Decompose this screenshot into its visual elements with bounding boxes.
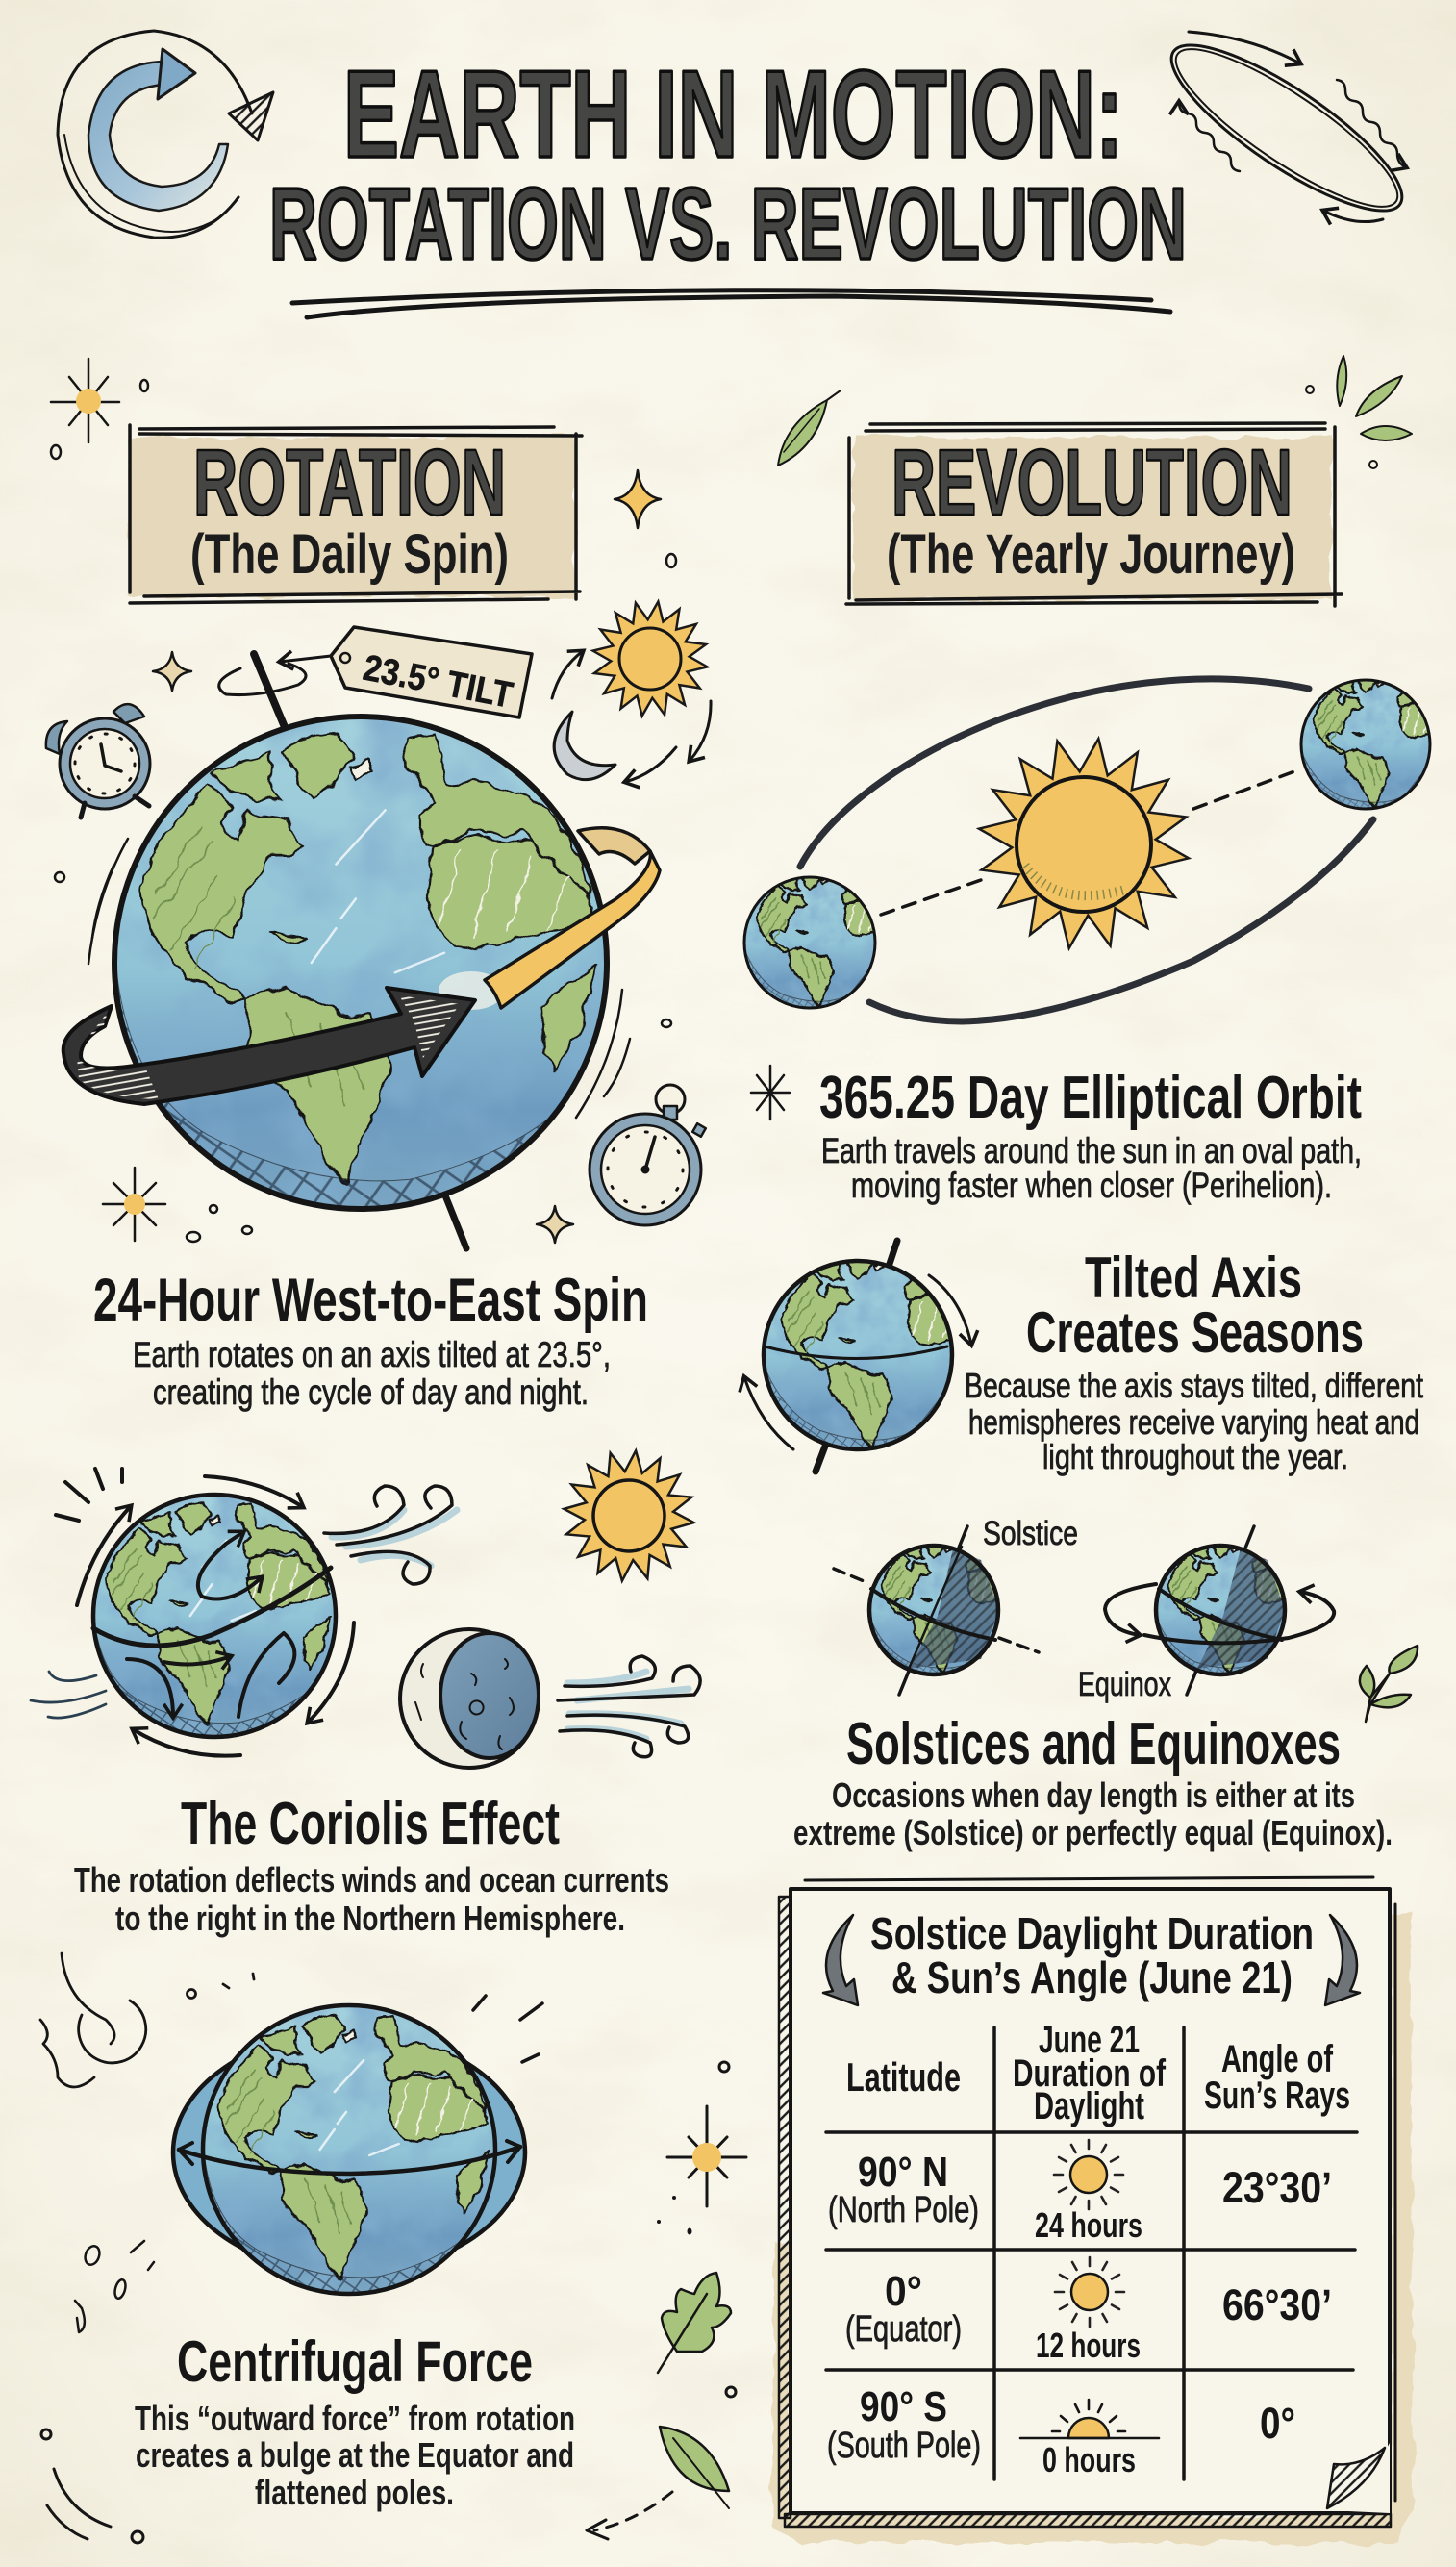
orbit path [800, 679, 1373, 1021]
text: coriolis [74, 1791, 669, 1938]
icon: leaves top right [1306, 356, 1412, 468]
text: centrifugal force [135, 2329, 575, 2512]
sparkles under globe [103, 1168, 573, 1243]
text: coriolis: The rotation deflects winds and ocean currents [74, 1860, 669, 1900]
row: south pole: 90° S [860, 2383, 947, 2430]
table headers: Latitude [846, 2054, 961, 2100]
wind swirls right [558, 1656, 700, 1757]
wind swirls upper [324, 1486, 457, 1584]
panel: revolution heading box: (The Yearly Journey) [887, 523, 1295, 586]
text: centrifugal force: creates a bulge at the Equator and [136, 2435, 574, 2475]
sparkle near globe [153, 652, 191, 691]
sun near coriolis [557, 1444, 701, 1588]
table headers: Daylight [1034, 2085, 1144, 2127]
icon: alarm clock [46, 704, 150, 818]
text: 24-hour spin [93, 1267, 648, 1412]
row: equator: 12 hours [1036, 2326, 1141, 2365]
title arrows [823, 1915, 1360, 2005]
coriolis globe with arrows [56, 1469, 354, 1756]
title [269, 45, 1187, 281]
text: centrifugal force: flattened poles. [255, 2473, 454, 2512]
table title: & Sun’s Angle (June 21) [891, 1952, 1293, 2002]
row: north pole: (North Pole) [828, 2190, 979, 2230]
row: equator [845, 2257, 1332, 2365]
title underline [292, 290, 1170, 317]
dashed lines [881, 770, 1297, 915]
text: coriolis: to the right in the Northern Hemisphere. [115, 1899, 625, 1938]
equinox globe [1105, 1526, 1334, 1695]
tilt axis [254, 654, 466, 1248]
sparkle beside rotation heading [615, 470, 676, 567]
text: centrifugal force: Centrifugal Force [177, 2329, 533, 2394]
text: tilted axis [965, 1246, 1423, 1476]
table frame [779, 1877, 1395, 2527]
rotation globe [89, 717, 660, 1234]
solstice globe [834, 1526, 1039, 1695]
text: centrifugal force: This “outward force” from rotation [135, 2399, 575, 2438]
decorative sparkle top left [51, 359, 148, 459]
icon: sun and moon cycle [552, 593, 715, 782]
star icon [751, 1066, 790, 1120]
row: north pole: 90° N [858, 2149, 948, 2196]
table headers: Sun’s Rays [1204, 2075, 1350, 2117]
text: elliptical orbit: moving faster when closer (Perihelion). [851, 1166, 1332, 1205]
wind swirls left [31, 1672, 106, 1718]
earth left [738, 869, 896, 1015]
icon: leaf near revolution heading [778, 390, 841, 466]
table headers: Angle of [1221, 2038, 1333, 2080]
moon [400, 1629, 539, 1768]
row: south pole: (South Pole) [827, 2426, 981, 2466]
table title [870, 1908, 1314, 2002]
row: south pole: 0° [1260, 2399, 1295, 2448]
table headers: June 21 [1039, 2019, 1140, 2061]
panel: rotation heading box: ROTATION [193, 430, 506, 535]
panel: rotation heading box [129, 425, 582, 603]
sparkle right of globe [658, 2062, 746, 2397]
text: coriolis: The Coriolis Effect [181, 1791, 560, 1857]
panel: solstice daylight table [772, 1877, 1414, 2542]
row: north pole: 24 hours [1035, 2205, 1142, 2245]
row: north pole [828, 2140, 1332, 2245]
label: equinox: Equinox [1078, 1666, 1171, 1703]
panel: rotation heading box: (The Daily Spin) [190, 523, 509, 586]
dashed arrow [587, 2492, 672, 2539]
marks lower left [41, 2429, 143, 2543]
tag: 23.5 tilt: 23.5° TILT [360, 648, 515, 717]
arrow band: black [63, 988, 475, 1104]
text: 24-hour spin: 24-Hour West-to-East Spin [93, 1267, 648, 1334]
text: tilted axis: light throughout the year. [1042, 1437, 1348, 1476]
text: solstices and equinoxes [793, 1711, 1393, 1852]
large sun [965, 724, 1203, 963]
tag: 23.5 tilt [219, 627, 532, 717]
text: tilted axis: Tilted Axis [1085, 1246, 1302, 1310]
table headers: Duration of [1013, 2052, 1166, 2095]
row: equator: 0° [885, 2268, 922, 2315]
table headers [846, 2019, 1350, 2127]
scribbles below globe [75, 2241, 154, 2332]
motion lines left [55, 839, 128, 964]
arrow band: yellow [439, 828, 660, 1010]
centrifugal globe [173, 2005, 525, 2308]
panel: revolution heading box [846, 423, 1342, 606]
icon: revolution orbit [1152, 19, 1421, 237]
grid lines [826, 2027, 1357, 2479]
icon: rotation arrow [58, 31, 273, 238]
elliptical orbit diagram [738, 672, 1451, 1021]
doodle swirl left [40, 1953, 542, 2087]
text: elliptical orbit [819, 1065, 1362, 1205]
icon: stopwatch [590, 1085, 706, 1225]
icon: oak leaf [658, 2273, 731, 2373]
row: south pole: 0 hours [1042, 2440, 1136, 2479]
paper shadow [772, 1911, 1414, 2542]
label: solstice: Solstice [983, 1515, 1078, 1552]
row: south pole [827, 2383, 1295, 2479]
text: 24-hour spin: Earth rotates on an axis tilted at 23.5°, [133, 1335, 611, 1374]
row: equator: 66°30’ [1222, 2280, 1332, 2329]
row: north pole: 23°30’ [1222, 2163, 1332, 2212]
text: 24-hour spin: creating the cycle of day and night. [153, 1372, 589, 1412]
icon: leaf lower right [660, 2427, 729, 2508]
earth right [1294, 672, 1451, 816]
motion lines right [576, 990, 671, 1118]
icon: leaf sprig [1360, 1646, 1418, 1722]
table title: Solstice Daylight Duration [870, 1908, 1314, 1958]
tilted globe [744, 1241, 983, 1472]
row: equator: (Equator) [845, 2309, 962, 2350]
